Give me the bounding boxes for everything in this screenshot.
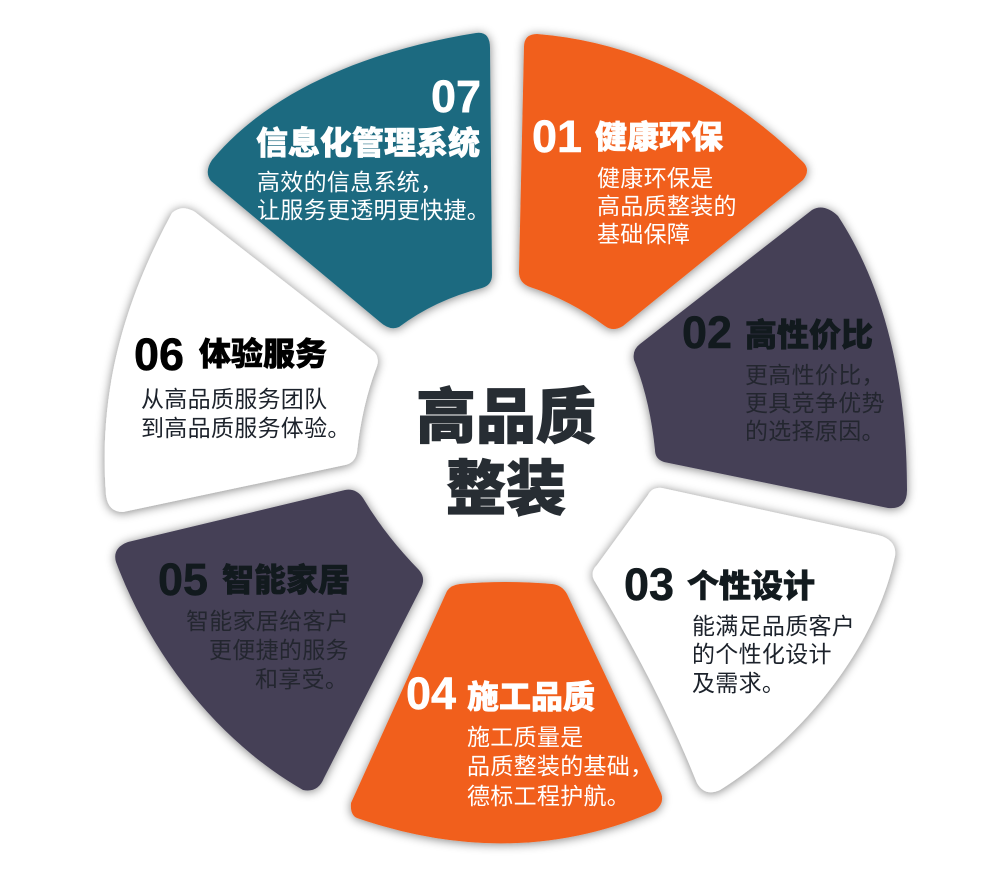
number 07: 07 <box>431 71 481 122</box>
panel: 01 健康环保: 基础保障 <box>597 221 690 247</box>
number 01: 01 <box>532 111 582 162</box>
body text: 施工质量是 <box>467 724 584 750</box>
panel: 04 施工品质 <box>351 582 662 843</box>
center title: 整装 <box>446 456 566 523</box>
number 04: 04 <box>406 668 456 719</box>
panel: 02 高性价比: 更具竞争优势 <box>745 390 885 416</box>
number 03: 03 <box>624 559 674 610</box>
panel: 07 信息化管理系统: 让服务更透明更快捷。 <box>257 197 490 223</box>
body text: 能满足品质客户 <box>692 613 855 639</box>
body text: 从高品质服务团队 <box>141 386 327 412</box>
panel: 03 个性设计: 及需求。 <box>692 670 785 696</box>
heading: 高性价比 <box>745 317 873 353</box>
panel: 02 高性价比: 的选择原因。 <box>745 418 885 444</box>
number 02: 02 <box>682 307 732 358</box>
number 05: 05 <box>158 554 208 605</box>
heading: 信息化管理系统 <box>256 125 480 161</box>
heading: 体验服务 <box>199 336 327 372</box>
center title <box>416 384 596 523</box>
body text: 健康环保是 <box>597 165 714 191</box>
panel: 01 健康环保 <box>519 34 807 329</box>
heading: 智能家居 <box>222 562 350 598</box>
heading: 施工品质 <box>467 679 595 715</box>
body text: 智能家居给客户 <box>186 608 349 634</box>
panel: 06 体验服务 <box>105 208 378 512</box>
panel: 07 信息化管理系统 <box>208 33 492 328</box>
panel: 05 智能家居: 和享受。 <box>255 666 348 692</box>
panel: 04 施工品质: 德标工程护航。 <box>467 783 630 809</box>
panel: 05 智能家居: 更便捷的服务 <box>209 637 349 663</box>
panel: 04 施工品质: 品质整装的基础， <box>467 753 653 779</box>
heading: 健康环保 <box>595 119 723 155</box>
panel: 03 个性设计 <box>593 488 895 792</box>
panel: 06 体验服务: 到高品质服务体验。 <box>141 415 351 441</box>
panel: 01 健康环保: 高品质整装的 <box>597 193 737 219</box>
heading: 个性设计 <box>687 568 815 604</box>
center title: 高品质 <box>416 384 596 451</box>
panel: 02 高性价比 <box>634 208 907 508</box>
body text: 更高性价比， <box>745 362 885 388</box>
panel: 05 智能家居 <box>115 490 423 790</box>
body text: 高效的信息系统， <box>257 169 443 195</box>
panel: 03 个性设计: 的个性化设计 <box>692 641 832 667</box>
number 06: 06 <box>134 329 184 380</box>
